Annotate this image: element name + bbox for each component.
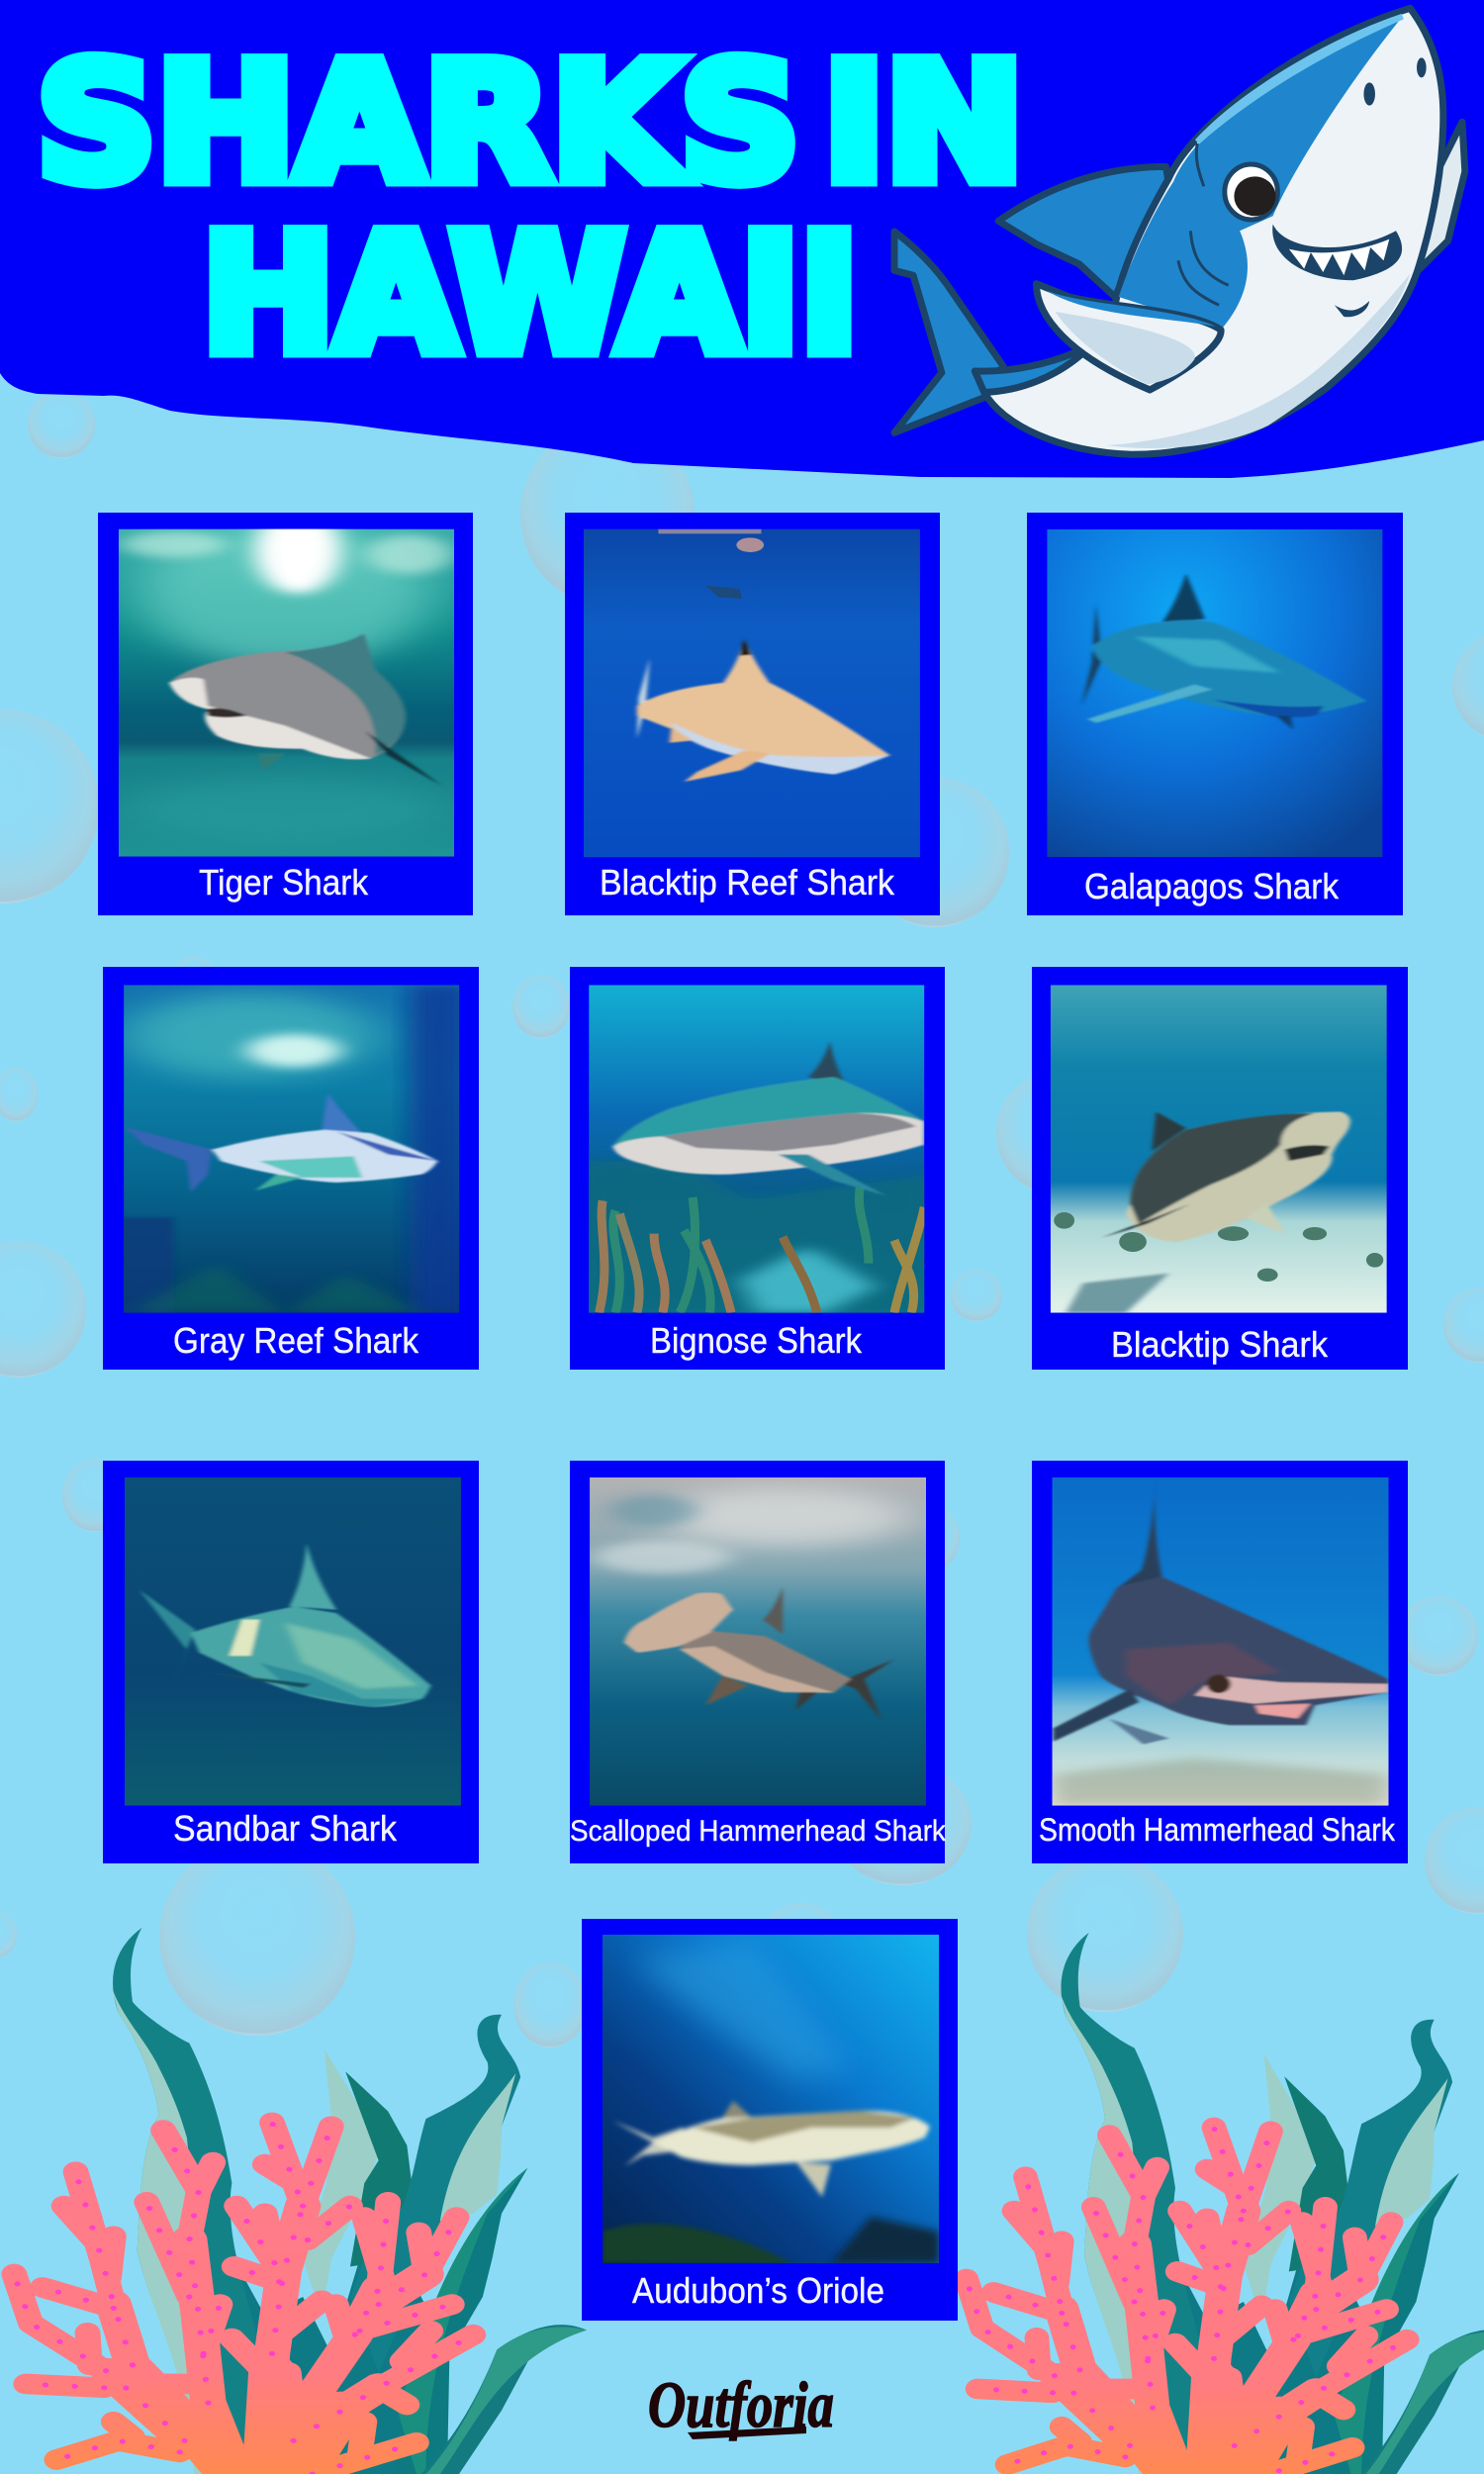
label: Audubon’s Oriole	[632, 2270, 884, 2311]
label: Galapagos Shark	[1084, 866, 1340, 906]
panel: Galapagos Shark card	[1027, 513, 1403, 915]
shark far pectoral fin	[1415, 122, 1465, 274]
shark tail stock	[974, 353, 1159, 399]
card frame	[98, 513, 473, 915]
card frame	[565, 513, 940, 915]
photo: whitetip shark	[603, 1935, 939, 2263]
shark mouth and teeth	[1272, 225, 1402, 280]
label: Smooth Hammerhead Shark	[1039, 1812, 1396, 1848]
label: Gray Reef Shark	[173, 1320, 419, 1361]
shark nostrils	[1335, 57, 1427, 317]
photo: galapagos shark	[1047, 529, 1382, 857]
panel: Sandbar Shark card	[103, 1461, 479, 1863]
label: Blacktip Reef Shark	[600, 862, 895, 903]
label: Bignose Shark	[650, 1320, 863, 1361]
card frame	[1032, 967, 1408, 1370]
card frame	[1032, 1461, 1408, 1863]
title	[37, 29, 1024, 389]
shark fin edge	[1046, 290, 1216, 327]
panel: Scalloped Hammerhead Shark card	[570, 1461, 947, 1863]
shark eye	[1225, 164, 1277, 220]
card frame	[103, 1461, 479, 1863]
label: Scalloped Hammerhead Shark	[570, 1815, 947, 1848]
panel: Bignose Shark card	[570, 967, 945, 1370]
shark fin patch	[1056, 312, 1195, 384]
label: Sandbar Shark	[173, 1808, 398, 1849]
seaweed leaves	[110, 1928, 587, 2474]
title: HAWAII	[202, 200, 859, 389]
shark body	[984, 8, 1443, 454]
shark snout highlight	[1197, 17, 1403, 142]
header wave banner	[0, 0, 1484, 478]
photo: tiger shark	[119, 508, 454, 857]
photo: gray reef shark	[114, 985, 470, 1316]
seaweed and coral: right	[967, 1933, 1484, 2474]
shark pectoral fin	[1036, 284, 1221, 390]
card frame	[103, 967, 479, 1370]
icon: cartoon shark mascot	[894, 8, 1465, 454]
photo: blacktip reef shark	[584, 529, 920, 857]
shark tail	[894, 232, 1003, 432]
label: Tiger Shark	[199, 862, 369, 903]
photo: scalloped hammerhead shark	[590, 1477, 926, 1806]
coral branches	[14, 2123, 473, 2474]
shark dorsal fin	[998, 166, 1168, 297]
photo: bignose shark	[577, 985, 937, 1316]
panel: Gray Reef Shark card	[103, 967, 479, 1370]
card frame	[582, 1919, 958, 2321]
panel: Blacktip Shark card	[1032, 967, 1408, 1370]
photo: smooth hammerhead shark	[1053, 1477, 1388, 1806]
label: Blacktip Shark	[1111, 1324, 1329, 1365]
shark gills	[1178, 143, 1229, 305]
panel: Smooth Hammerhead Shark card	[1032, 1461, 1408, 1863]
panel: Blacktip Reef Shark card	[565, 513, 940, 915]
photo: blacktip shark	[1051, 985, 1387, 1313]
panel: Audubon's Oriole card	[582, 1919, 958, 2321]
title: SHARKS IN	[37, 29, 1024, 218]
shark blue back	[1119, 17, 1403, 330]
bubbles	[0, 391, 1484, 2047]
card frame	[570, 967, 945, 1370]
card frame	[1027, 513, 1403, 915]
seaweed and coral: left	[14, 1928, 587, 2474]
panel: Tiger Shark card	[98, 508, 473, 915]
shark belly shade	[1107, 274, 1410, 448]
card frame	[570, 1461, 945, 1863]
photo: sandbar shark	[125, 1477, 461, 1806]
logo: Outforia: Outforia	[648, 2369, 834, 2441]
